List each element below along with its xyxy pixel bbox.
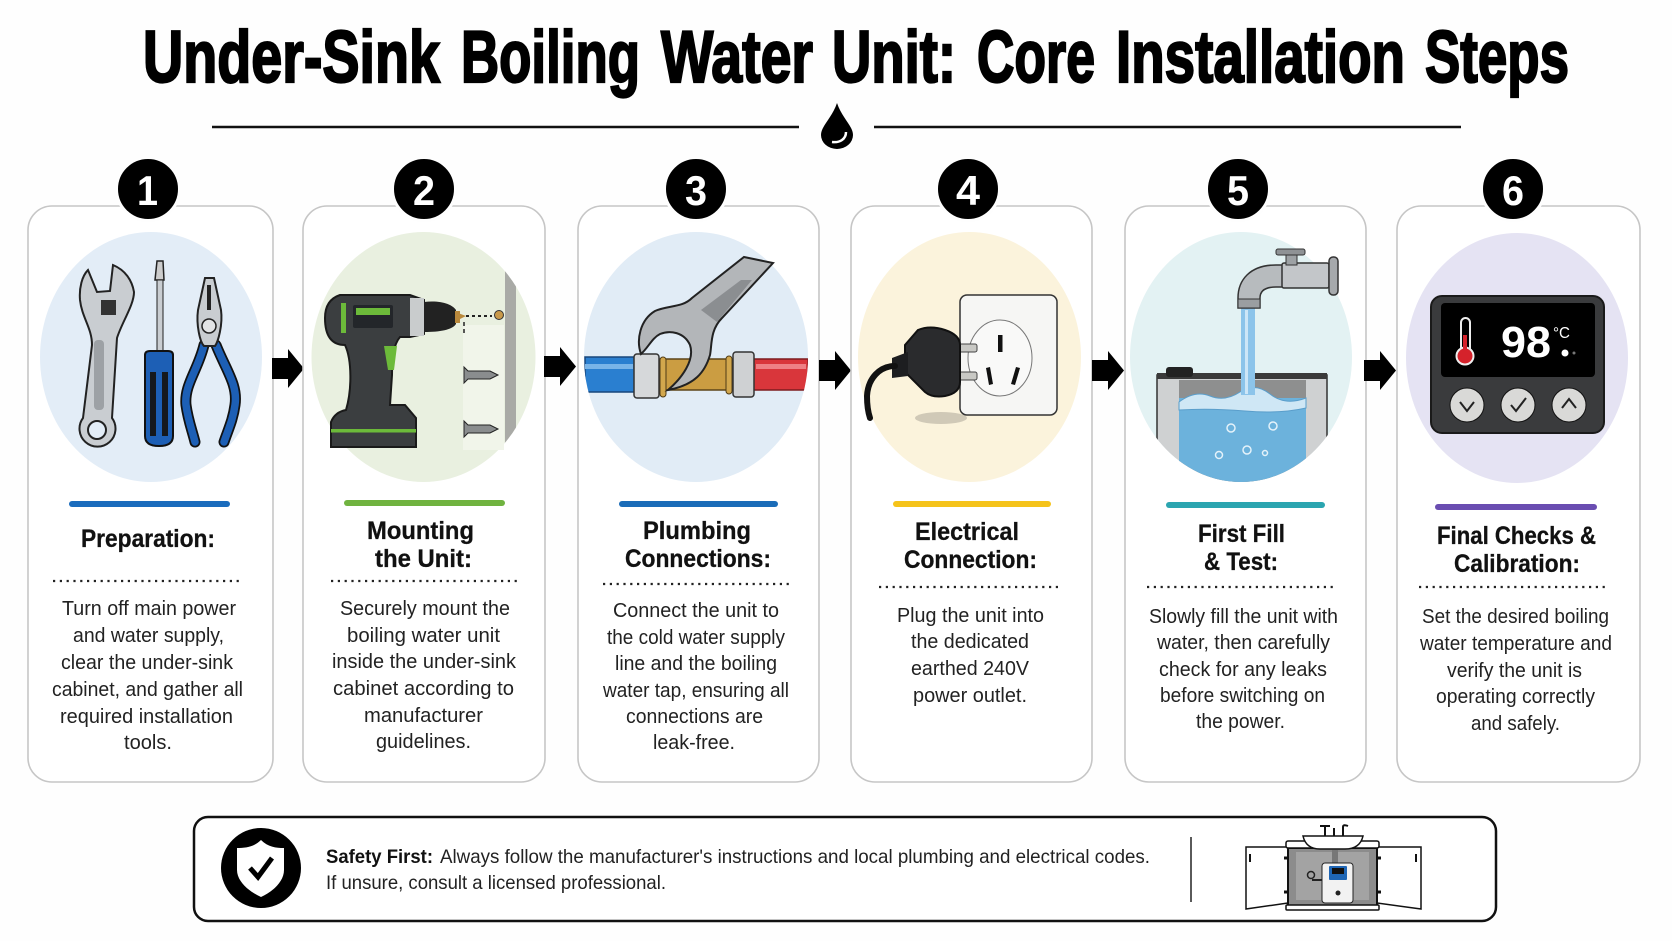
title: Installation: [1116, 17, 1405, 98]
heading: the Unit:: [375, 545, 472, 573]
heading: First Fill: [1198, 520, 1285, 548]
title: Unit:: [832, 17, 956, 98]
body text: Securely mount the: [340, 598, 510, 620]
body text: line and the boiling: [615, 653, 777, 675]
body text: boiling water unit: [347, 625, 500, 647]
step number 5: 5: [1227, 167, 1249, 214]
panel: step 2 mounting: [303, 158, 545, 782]
body text: Slowly fill the unit with: [1149, 606, 1338, 628]
accent bar: [1166, 502, 1325, 508]
step number 6: [1482, 158, 1544, 220]
panel: step 6 final checks: [1397, 158, 1640, 782]
step number 2: [392, 158, 456, 220]
heading: Electrical: [915, 518, 1019, 546]
title: Under-Sink: [143, 17, 440, 98]
step number 2: 2: [413, 167, 435, 214]
title: Steps: [1425, 17, 1569, 98]
arrow 5 to 6: [1364, 351, 1396, 390]
body text: Set the desired boiling: [1422, 606, 1609, 628]
accent bar: [893, 501, 1051, 507]
title divider with water drop: [212, 103, 1461, 149]
body text: cabinet, and gather all: [52, 679, 243, 701]
body text: the dedicated: [911, 631, 1029, 653]
body text: clear the under-sink: [61, 652, 234, 674]
icon: under-sink cabinet with unit: [1246, 825, 1421, 910]
heading: Connections:: [625, 545, 771, 573]
body text: and water supply,: [73, 625, 224, 647]
panel: step 4 electrical: [851, 158, 1092, 782]
body text: connections are: [626, 706, 763, 728]
body text: water temperature and: [1419, 633, 1612, 655]
body text: [1149, 606, 1338, 733]
body text: water tap, ensuring all: [602, 680, 789, 702]
body text: [602, 600, 789, 754]
arrow 4 to 5: [1092, 351, 1124, 390]
heading: [904, 518, 1037, 574]
body text: the power.: [1196, 711, 1285, 733]
body text: leak-free.: [653, 732, 735, 754]
arrow 3 to 4: [819, 351, 851, 390]
title: Boiling: [461, 17, 640, 98]
panel: step 3 plumbing: [578, 158, 819, 782]
accent bar: [69, 501, 230, 507]
body text: inside the under-sink: [332, 651, 517, 673]
panel: step 5 first fill: [1125, 158, 1366, 782]
body text: earthed 240V: [911, 658, 1030, 680]
body text: water, then carefully: [1156, 632, 1330, 654]
body text: Plug the unit into: [897, 605, 1044, 627]
arrow 1 to 2: [272, 349, 304, 388]
panel: step 1 preparation: [28, 158, 273, 782]
illustration: temperature control panel: °C: [1553, 325, 1570, 342]
accent bar: [1435, 504, 1597, 510]
step number 6: 6: [1502, 167, 1524, 214]
accent bar: [619, 501, 778, 507]
body text: and safely.: [1471, 713, 1560, 735]
illustration: hand tools: [40, 232, 262, 482]
heading: Preparation:: [81, 525, 215, 553]
safety text: If unsure, consult a licensed professional.: [326, 872, 666, 894]
step number 5: [1206, 158, 1270, 220]
body text: [1419, 606, 1612, 735]
heading: Plumbing: [643, 517, 751, 545]
step number 4: 4: [956, 167, 981, 214]
illustration: spanner on pipes: [584, 232, 808, 482]
illustration: drill and screws: [312, 232, 536, 482]
body text: cabinet according to: [333, 678, 514, 700]
heading: [367, 517, 474, 573]
body text: operating correctly: [1436, 686, 1595, 708]
body text: required installation: [60, 706, 233, 728]
illustration: tap filling tank: [1130, 232, 1352, 488]
title: Core: [977, 17, 1095, 98]
body text: verify the unit is: [1447, 660, 1582, 682]
heading: [1437, 522, 1596, 578]
heading: & Test:: [1204, 548, 1278, 576]
step number 3: [664, 158, 728, 220]
heading: [625, 517, 771, 573]
illustration: temperature control panel: [1406, 233, 1628, 483]
arrow 2 to 3: [544, 347, 576, 386]
body text: Turn off main power: [62, 598, 236, 620]
title: Water: [661, 17, 813, 98]
step number 1: 1: [137, 167, 158, 214]
step number 4: [936, 158, 1000, 220]
body text: tools.: [124, 732, 172, 754]
body text: before switching on: [1160, 685, 1325, 707]
body text: the cold water supply: [607, 627, 785, 649]
illustration: temperature control panel: 98: [1501, 318, 1551, 367]
panel: safety callout: [194, 817, 1496, 921]
step number 1: [116, 158, 180, 220]
icon: shield with check: [221, 828, 301, 908]
safety text: Safety First:: [326, 846, 433, 868]
body text: check for any leaks: [1159, 659, 1327, 681]
body text: power outlet.: [913, 685, 1027, 707]
body text: [52, 598, 243, 754]
title: [143, 17, 1569, 98]
safety text: [326, 846, 1150, 894]
safety text: Always follow the manufacturer's instructions and local plumbing and electrical codes.: [440, 846, 1150, 868]
body text: Connect the unit to: [613, 600, 779, 622]
accent bar: [344, 500, 505, 506]
step number 3: 3: [685, 167, 707, 214]
body text: manufacturer: [364, 705, 483, 727]
heading: Mounting: [367, 517, 474, 545]
body text: guidelines.: [376, 731, 471, 753]
heading: [1198, 520, 1285, 576]
illustration: plug and socket: [858, 232, 1081, 482]
heading: Calibration:: [1454, 550, 1580, 578]
heading: Final Checks &: [1437, 522, 1596, 550]
body text: [897, 605, 1044, 707]
heading: Connection:: [904, 546, 1037, 574]
body text: [332, 598, 517, 753]
